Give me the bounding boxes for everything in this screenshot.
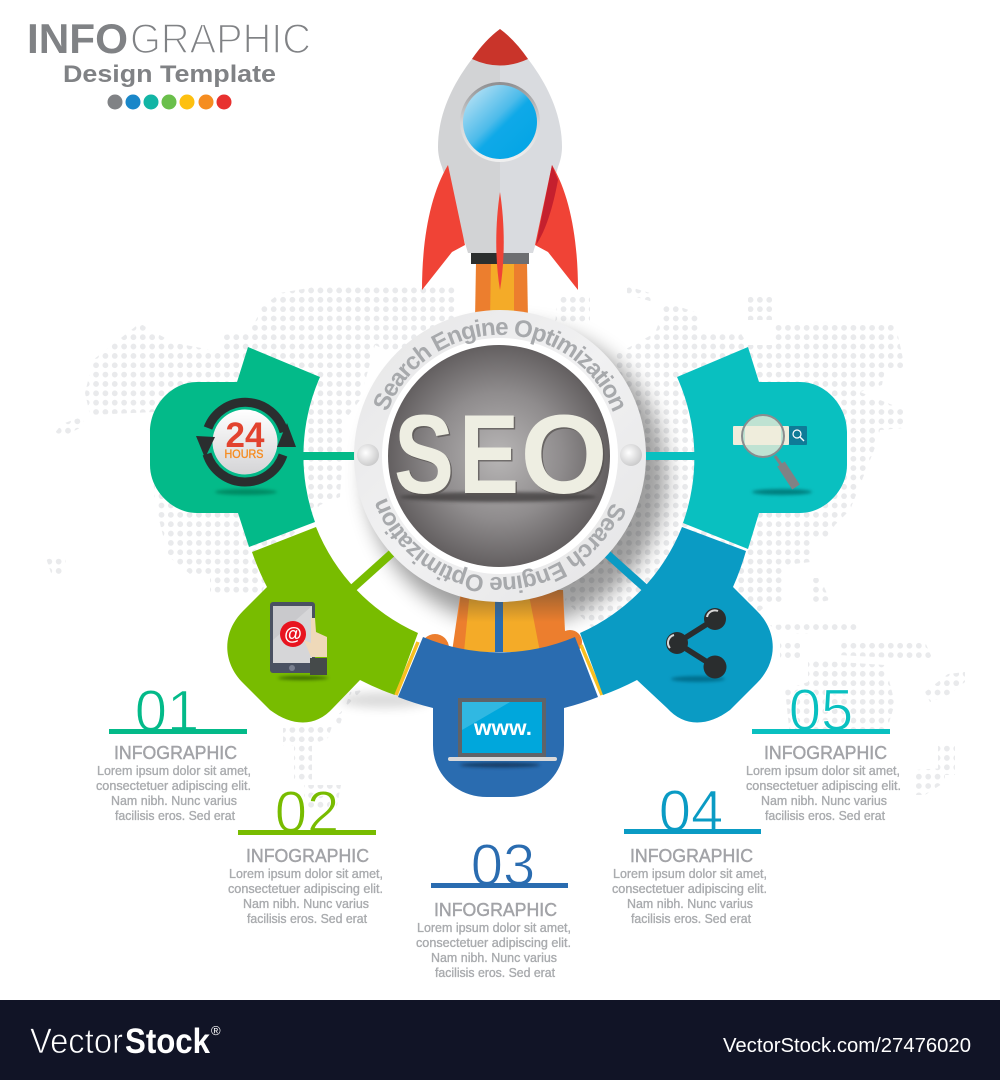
segment 3: blue with laptop icon [396, 637, 602, 797]
footer brand: Vector [30, 1022, 123, 1061]
text block 05: 05 [789, 678, 853, 743]
icon: 24 hours: HOURS [224, 447, 264, 461]
centre fin [496, 192, 504, 290]
logo title: INFO [27, 15, 128, 62]
text block 03: INFOGRAPHIC [434, 899, 557, 920]
text block 03: 03 [471, 833, 535, 898]
ring studs [357, 444, 642, 466]
text block 04: Nam nibh. Nunc varius [627, 896, 753, 911]
logo subtitle: Design Template [63, 61, 276, 88]
footer url: VectorStock.com/27476020 [723, 1035, 971, 1057]
text block 01: 01 [135, 679, 199, 744]
text block 03: Lorem ipsum dolor sit amet, [417, 920, 571, 935]
segment 5: cyan with search icon [677, 347, 847, 549]
text block 02: facilisis eros. Sed erat [247, 911, 367, 926]
text block 04: consectetuer adipiscing elit. [612, 881, 767, 896]
text block 02: Lorem ipsum dolor sit amet, [229, 866, 383, 881]
SEO word shadow: E [460, 394, 520, 518]
text block 04: facilisis eros. Sed erat [631, 911, 751, 926]
SEO word: E [459, 392, 519, 517]
icon: tablet: @ [284, 624, 302, 644]
icon: 24 hours [196, 402, 296, 495]
segment 2: green with tablet icon [227, 527, 418, 723]
text block 02: Nam nibh. Nunc varius [243, 896, 369, 911]
rocket body [438, 29, 562, 253]
SEO word: S [394, 392, 454, 517]
icon: tablet [270, 602, 328, 680]
rocket flame [475, 262, 528, 320]
soft shadow below segments [340, 692, 430, 708]
colour dots [108, 94, 232, 110]
text block 05: Nam nibh. Nunc varius [761, 793, 887, 808]
icon: 24 hours: 24 [226, 416, 265, 455]
connector bars [300, 452, 700, 597]
text block 01: Nam nibh. Nunc varius [111, 793, 237, 808]
left fin [422, 165, 465, 290]
SEO word shadow: S [396, 394, 456, 518]
text block 01: facilisis eros. Sed erat [115, 808, 235, 823]
SEO word: O [520, 392, 608, 517]
text block 03: Nam nibh. Nunc varius [431, 950, 557, 965]
icon: share [666, 608, 726, 682]
text block 04: Lorem ipsum dolor sit amet, [613, 866, 767, 881]
text block 03: consectetuer adipiscing elit. [416, 935, 571, 950]
footer brand: Stock [125, 1022, 210, 1061]
SEO word [394, 392, 608, 517]
dotted world map [31, 290, 970, 805]
SEO word shadow [396, 394, 609, 518]
text block 01: INFOGRAPHIC [114, 742, 237, 763]
rocket [422, 29, 578, 320]
icon: laptop [448, 698, 557, 768]
porthole [460, 82, 540, 162]
text block 05: INFOGRAPHIC [764, 742, 887, 763]
nozzle [471, 253, 529, 264]
text block 05 [746, 678, 901, 823]
logo [27, 15, 311, 110]
text block 05: facilisis eros. Sed erat [765, 808, 885, 823]
SEO word shadow: O [522, 394, 609, 518]
text block 04: 04 [659, 779, 723, 844]
ring text top: Search Engine Optimization [374, 319, 624, 412]
text block 02: consectetuer adipiscing elit. [228, 881, 383, 896]
outer ring [354, 310, 646, 602]
grey disc [388, 345, 610, 567]
text block 02 [228, 780, 383, 926]
segment 1: teal with 24 hours icon [150, 347, 320, 547]
segment 4: light blue with share icon [580, 527, 773, 723]
footer bar [0, 1000, 1000, 1080]
ring drop shadow [366, 326, 666, 626]
text block 05: Lorem ipsum dolor sit amet, [746, 763, 900, 778]
text block 04 [612, 779, 767, 926]
text block 02: INFOGRAPHIC [246, 845, 369, 866]
text block 04: INFOGRAPHIC [630, 845, 753, 866]
text block 01: Lorem ipsum dolor sit amet, [97, 763, 251, 778]
registered mark: ® [211, 1023, 221, 1038]
rocket exhaust below ring [421, 590, 582, 662]
text block 01 [96, 679, 251, 823]
right fin [535, 165, 578, 290]
central SEO badge [354, 310, 646, 602]
text block 05: consectetuer adipiscing elit. [746, 778, 901, 793]
rocket nose cone [472, 29, 528, 66]
ring text bottom: Search Engine Optimization [376, 498, 625, 594]
logo title: GRAPHIC [130, 15, 311, 62]
text block 03: facilisis eros. Sed erat [435, 965, 555, 980]
text block 01: consectetuer adipiscing elit. [96, 778, 251, 793]
text block 03 [416, 833, 571, 980]
text block 02: 02 [275, 780, 339, 845]
SEO floor shadow [400, 492, 596, 502]
icon: magnifier and search bar [733, 415, 812, 495]
icon: laptop: www. [473, 717, 532, 740]
